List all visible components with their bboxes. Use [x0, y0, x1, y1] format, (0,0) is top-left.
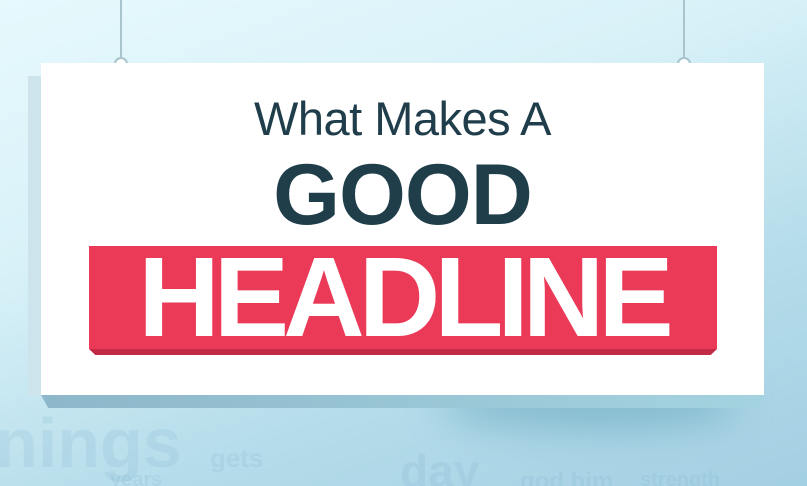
sign left edge depth [28, 76, 42, 396]
red banner: HEADLINE: HEADLINE [138, 234, 668, 360]
sign bottom depth [41, 395, 764, 408]
background faint words: nings [0, 404, 182, 482]
heading: GOOD: GOOD [273, 147, 532, 243]
subtitle: What Makes A: What Makes A [254, 92, 551, 145]
background faint words: gets [210, 443, 263, 473]
sign panel [41, 63, 764, 395]
hanging strings [114, 0, 691, 63]
sign shadow [440, 380, 740, 430]
